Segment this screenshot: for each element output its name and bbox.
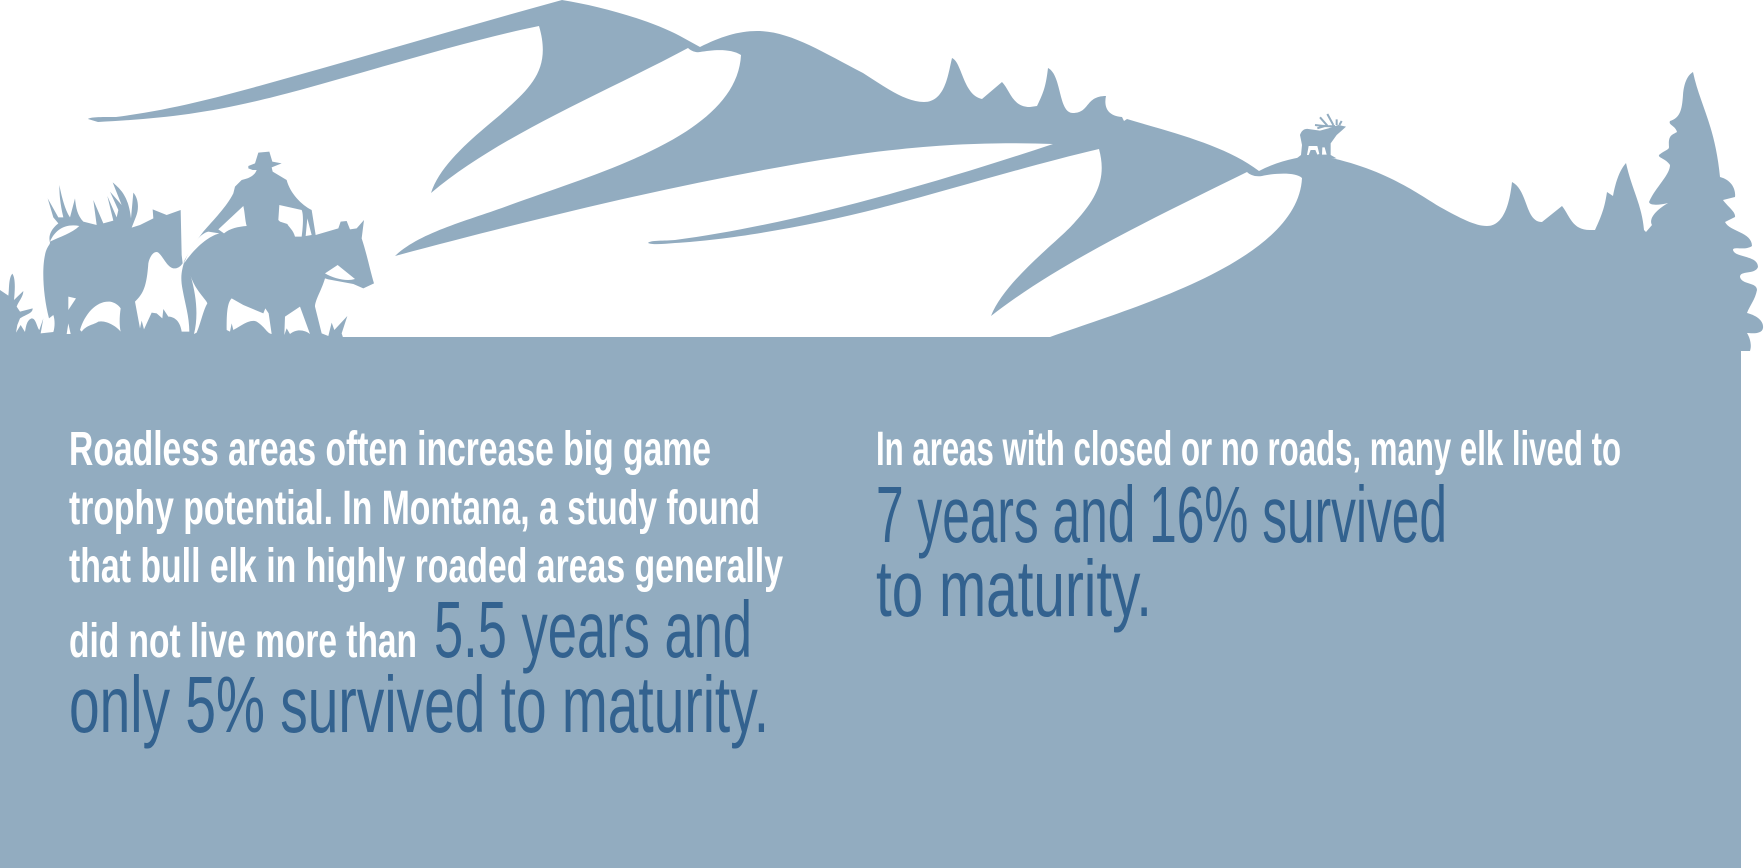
callout: 7 years statistic: to maturity. bbox=[876, 544, 1152, 633]
callout: 5.5 years statistic: 5.5 years and bbox=[434, 585, 752, 674]
text block: left column intro bbox=[69, 423, 783, 668]
callout: 5.5 years statistic: only 5% survived to maturity. bbox=[69, 660, 769, 749]
text block: left column intro: that bull elk in highly roaded areas generally bbox=[69, 540, 783, 593]
callout: 7 years statistic bbox=[876, 470, 1447, 633]
text block: left column intro: Roadless areas often increase big game bbox=[69, 423, 711, 476]
icon: bugling elk on hill bbox=[1297, 114, 1346, 158]
callout: 5.5 years statistic bbox=[69, 585, 769, 749]
text block: left column intro: trophy potential. In Montana, a study found bbox=[69, 482, 760, 535]
text block: left column intro: did not live more than bbox=[69, 615, 417, 668]
icon: elk and rider on horseback silhouette bbox=[0, 152, 374, 343]
